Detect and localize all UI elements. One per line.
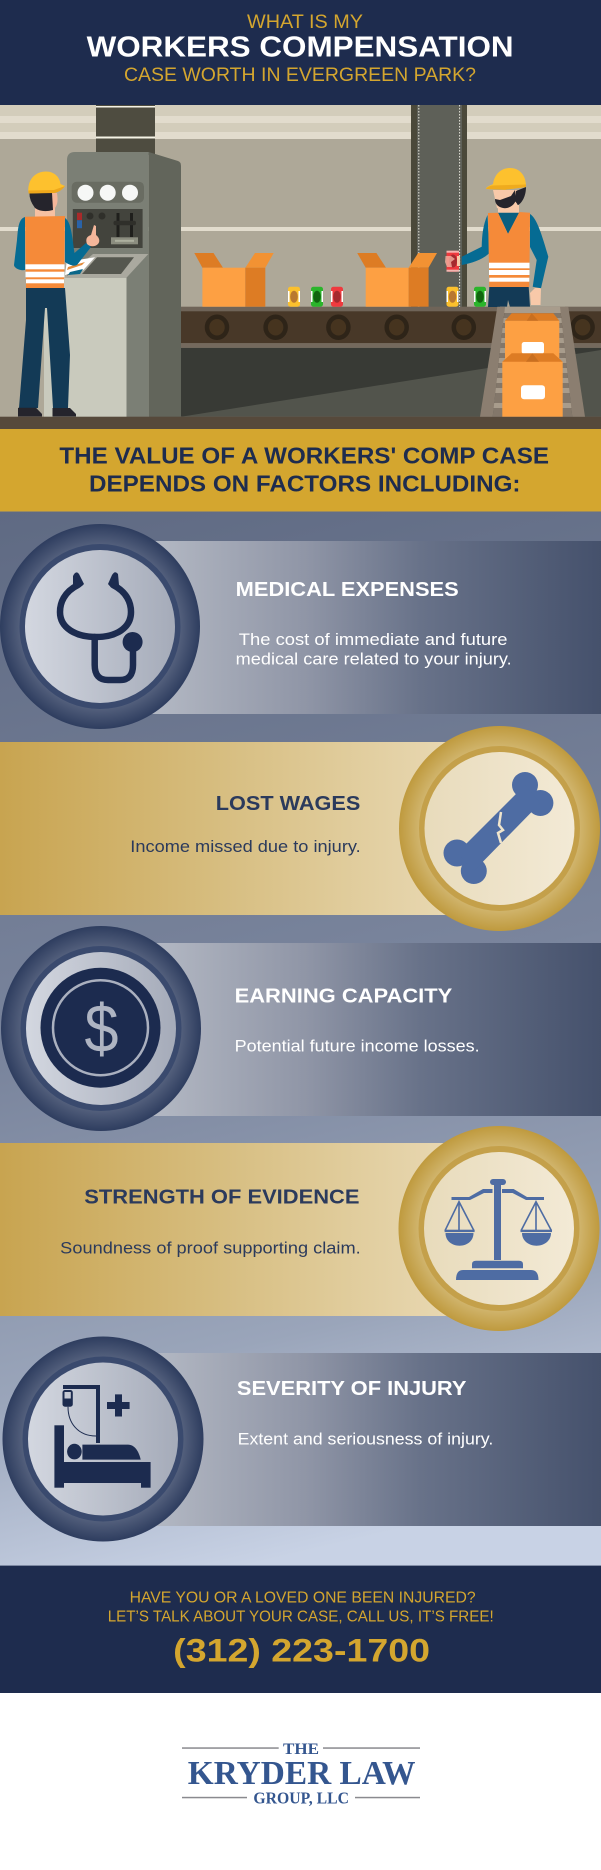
logo text: KRYDER LAW (188, 1755, 416, 1792)
description: The cost of immediate and future (239, 631, 508, 649)
green can (311, 287, 323, 307)
heading: STRENGTH OF EVIDENCE (84, 1186, 360, 1209)
factors section background (0, 512, 601, 1566)
indicator lights (72, 182, 144, 203)
heading: EARNING CAPACITY (235, 985, 453, 1008)
heading: MEDICAL EXPENSES (236, 578, 459, 601)
icon: broken bone (399, 726, 600, 931)
subheading line 1: THE VALUE OF A WORKERS' COMP CASE (59, 443, 549, 469)
floor strip (0, 417, 601, 429)
cta line 1: HAVE YOU OR A LOVED ONE BEEN INJURED? (130, 1590, 476, 1606)
yellow can 2 (446, 287, 458, 307)
icon: stethoscope (0, 524, 200, 729)
logo text: THE (283, 1741, 319, 1758)
title line 2: WORKERS COMPENSATION (87, 32, 514, 64)
held red can (445, 251, 460, 272)
factor: severity of injury (2, 1336, 601, 1542)
pillar (411, 105, 467, 308)
green can 2 (474, 287, 486, 307)
description: Soundness of proof supporting claim. (60, 1239, 361, 1257)
worker at conveyor (445, 168, 548, 307)
papers (65, 257, 95, 275)
white footer with logo (0, 1693, 601, 1870)
description: Potential future income losses. (235, 1037, 480, 1055)
subheading line 2: DEPENDS ON FACTORS INCLUDING: (89, 471, 520, 497)
icon: hospital bed (2, 1336, 204, 1542)
band (150, 1353, 601, 1526)
description: medical care related to your injury. (236, 650, 512, 668)
cans (288, 287, 486, 307)
wall (0, 105, 601, 417)
red can (331, 287, 343, 307)
conveyor belt (181, 307, 601, 417)
header banner (0, 0, 601, 105)
icon: scales of justice (398, 1126, 600, 1331)
factor: lost wages (0, 726, 600, 931)
open box 1 (194, 253, 274, 307)
subheading band (0, 429, 601, 512)
factory scene illustration (0, 105, 601, 429)
phone number: (312) 223-1700 (173, 1632, 430, 1668)
factor: medical expenses (0, 524, 601, 729)
logo rules (182, 1747, 420, 1798)
lower box (502, 353, 563, 417)
yellow can (288, 287, 300, 307)
open box 2 (357, 253, 437, 307)
title line 3: CASE WORTH IN EVERGREEN PARK? (124, 64, 476, 86)
worker at machine (14, 172, 99, 416)
heading: LOST WAGES (216, 792, 360, 815)
icon: dollar coin (1, 926, 201, 1131)
description: Income missed due to injury. (130, 838, 361, 856)
title line 1: WHAT IS MY (247, 11, 363, 33)
factor: earning capacity (1, 926, 601, 1131)
band (0, 1143, 450, 1316)
cta line 2: LET’S TALK ABOUT YOUR CASE, CALL US, IT’S FREE! (108, 1608, 494, 1625)
logo text (188, 1741, 416, 1808)
description: Extent and seriousness of injury. (238, 1431, 493, 1449)
control panel (73, 209, 143, 248)
factor: strength of evidence (0, 1126, 600, 1331)
heading: SEVERITY OF INJURY (237, 1377, 467, 1400)
control machine (44, 152, 181, 417)
band (0, 742, 450, 915)
upper box (505, 313, 559, 363)
call to action footer (0, 1566, 601, 1693)
description (236, 631, 512, 668)
icon: dollar coin: $ (84, 991, 118, 1067)
logo text: GROUP, LLC (253, 1788, 349, 1808)
band (150, 943, 601, 1116)
ramp with stacked boxes (480, 307, 585, 417)
band (150, 541, 601, 714)
duct (96, 105, 155, 155)
